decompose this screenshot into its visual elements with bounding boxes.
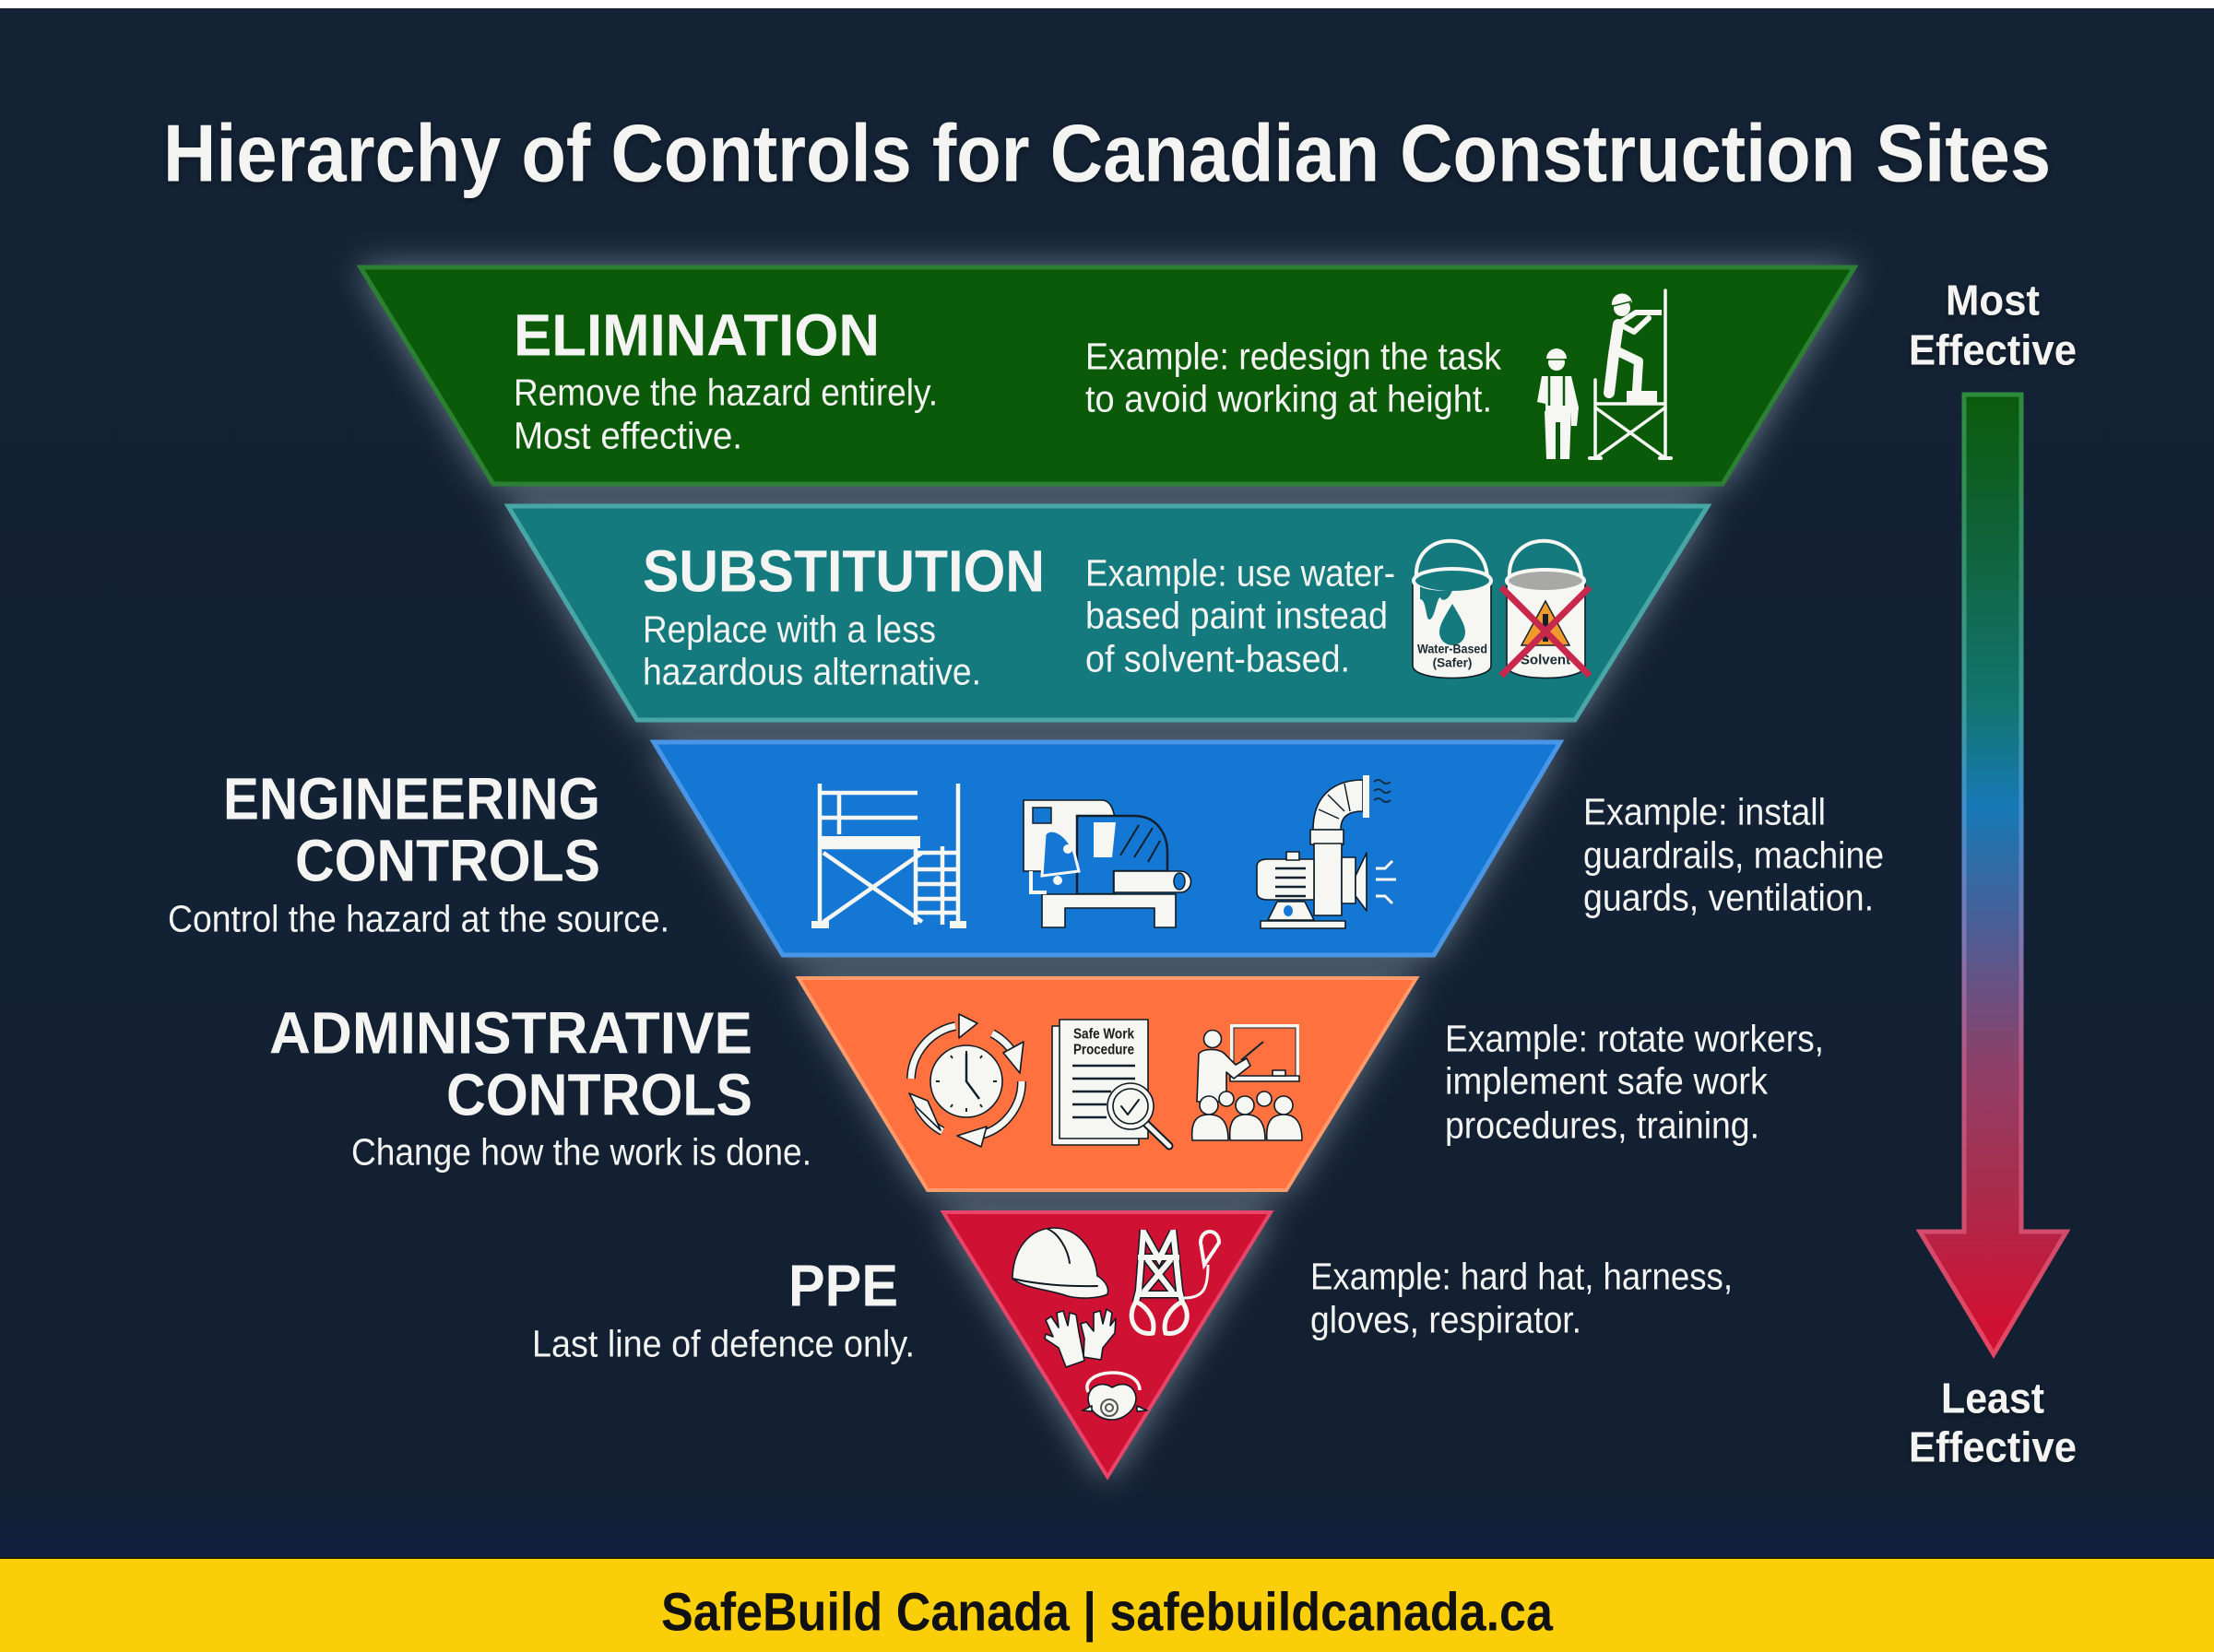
icon: solvent paint can crossed out xyxy=(1501,541,1590,678)
icon: safe work procedure document: Safe Work xyxy=(1073,1027,1134,1042)
icon: safe work procedure document xyxy=(1052,1020,1169,1146)
engineering example xyxy=(1583,791,1884,918)
engineering example: guardrails, machine xyxy=(1583,833,1884,876)
icon: trainer and audience xyxy=(1192,1026,1302,1140)
most effective label: Most xyxy=(1946,277,2040,324)
engineering description: Control the hazard at the source. xyxy=(168,898,669,940)
elimination example: to avoid working at height. xyxy=(1085,378,1492,420)
panel: PPE xyxy=(532,1212,1733,1477)
administrative example xyxy=(1445,1018,1824,1147)
icon: water-based paint can xyxy=(1413,541,1491,678)
elimination example: Example: redesign the task xyxy=(1085,336,1501,378)
icon: scaffold with guardrails xyxy=(811,784,966,928)
PPE example: gloves, respirator. xyxy=(1310,1298,1581,1340)
substitution example: based paint instead xyxy=(1085,594,1388,636)
panel: engineering controls xyxy=(168,742,1884,955)
PPE example: Example: hard hat, harness, xyxy=(1310,1256,1733,1298)
most effective label xyxy=(1909,277,2077,374)
footer text: SafeBuild Canada | safebuildcanada.ca xyxy=(661,1582,1554,1643)
icon: machine guard xyxy=(1024,800,1191,927)
icon: ventilation fan xyxy=(1257,775,1396,928)
icon: safety harness xyxy=(1131,1230,1219,1334)
elimination description xyxy=(514,371,938,457)
panel: substitution xyxy=(508,506,1708,720)
elimination heading: ELIMINATION xyxy=(514,302,880,369)
substitution example: Example: use water- xyxy=(1085,551,1395,594)
panel: elimination xyxy=(361,267,1854,484)
PPE example xyxy=(1310,1256,1733,1340)
PPE description: Last line of defence only. xyxy=(532,1322,915,1364)
substitution description xyxy=(643,608,981,693)
icon: safe work procedure document: Procedure xyxy=(1073,1042,1134,1058)
engineering heading: CONTROLS xyxy=(295,828,600,894)
substitution example: of solvent-based. xyxy=(1085,638,1350,680)
PPE heading: PPE xyxy=(788,1252,898,1318)
icon: work gloves xyxy=(1045,1309,1116,1367)
administrative example: implement safe work xyxy=(1445,1060,1768,1103)
icon: workers and scaffold xyxy=(1537,290,1671,459)
substitution heading: SUBSTITUTION xyxy=(643,538,1045,605)
substitution description: hazardous alternative. xyxy=(643,651,981,693)
icon: respirator mask xyxy=(1083,1373,1147,1420)
engineering example: guards, ventilation. xyxy=(1583,876,1874,918)
least effective label: Effective xyxy=(1909,1423,2077,1471)
engineering heading: ENGINEERING xyxy=(223,765,600,832)
most effective label: Effective xyxy=(1909,326,2077,374)
icon: hard hat xyxy=(1012,1228,1108,1298)
administrative heading: CONTROLS xyxy=(446,1062,752,1128)
panel: administrative controls xyxy=(269,978,1824,1190)
icon: rotating clock xyxy=(909,1014,1024,1147)
gradient arrow xyxy=(1920,395,2066,1354)
substitution description: Replace with a less xyxy=(643,608,936,651)
administrative heading xyxy=(269,999,752,1128)
engineering example: Example: install xyxy=(1583,791,1826,833)
icon: water-based paint can: Water-Based xyxy=(1417,642,1487,656)
effectiveness arrow xyxy=(1909,277,2077,1471)
administrative example: procedures, training. xyxy=(1445,1104,1759,1147)
administrative description: Change how the work is done. xyxy=(351,1130,811,1173)
substitution example xyxy=(1085,551,1395,680)
least effective label xyxy=(1909,1374,2077,1471)
title: Hierarchy of Controls for Canadian Construction Sites xyxy=(163,107,2051,199)
elimination description: Most effective. xyxy=(514,415,742,457)
elimination example xyxy=(1085,336,1501,420)
engineering heading xyxy=(223,765,600,894)
footer bar xyxy=(0,1557,2214,1652)
least effective label: Least xyxy=(1941,1374,2044,1422)
elimination description: Remove the hazard entirely. xyxy=(514,371,938,413)
icon: water-based paint can: (Safer) xyxy=(1433,656,1472,669)
icon: solvent paint can crossed out: Solvent xyxy=(1521,653,1570,667)
administrative heading: ADMINISTRATIVE xyxy=(269,999,752,1066)
administrative example: Example: rotate workers, xyxy=(1445,1018,1824,1060)
